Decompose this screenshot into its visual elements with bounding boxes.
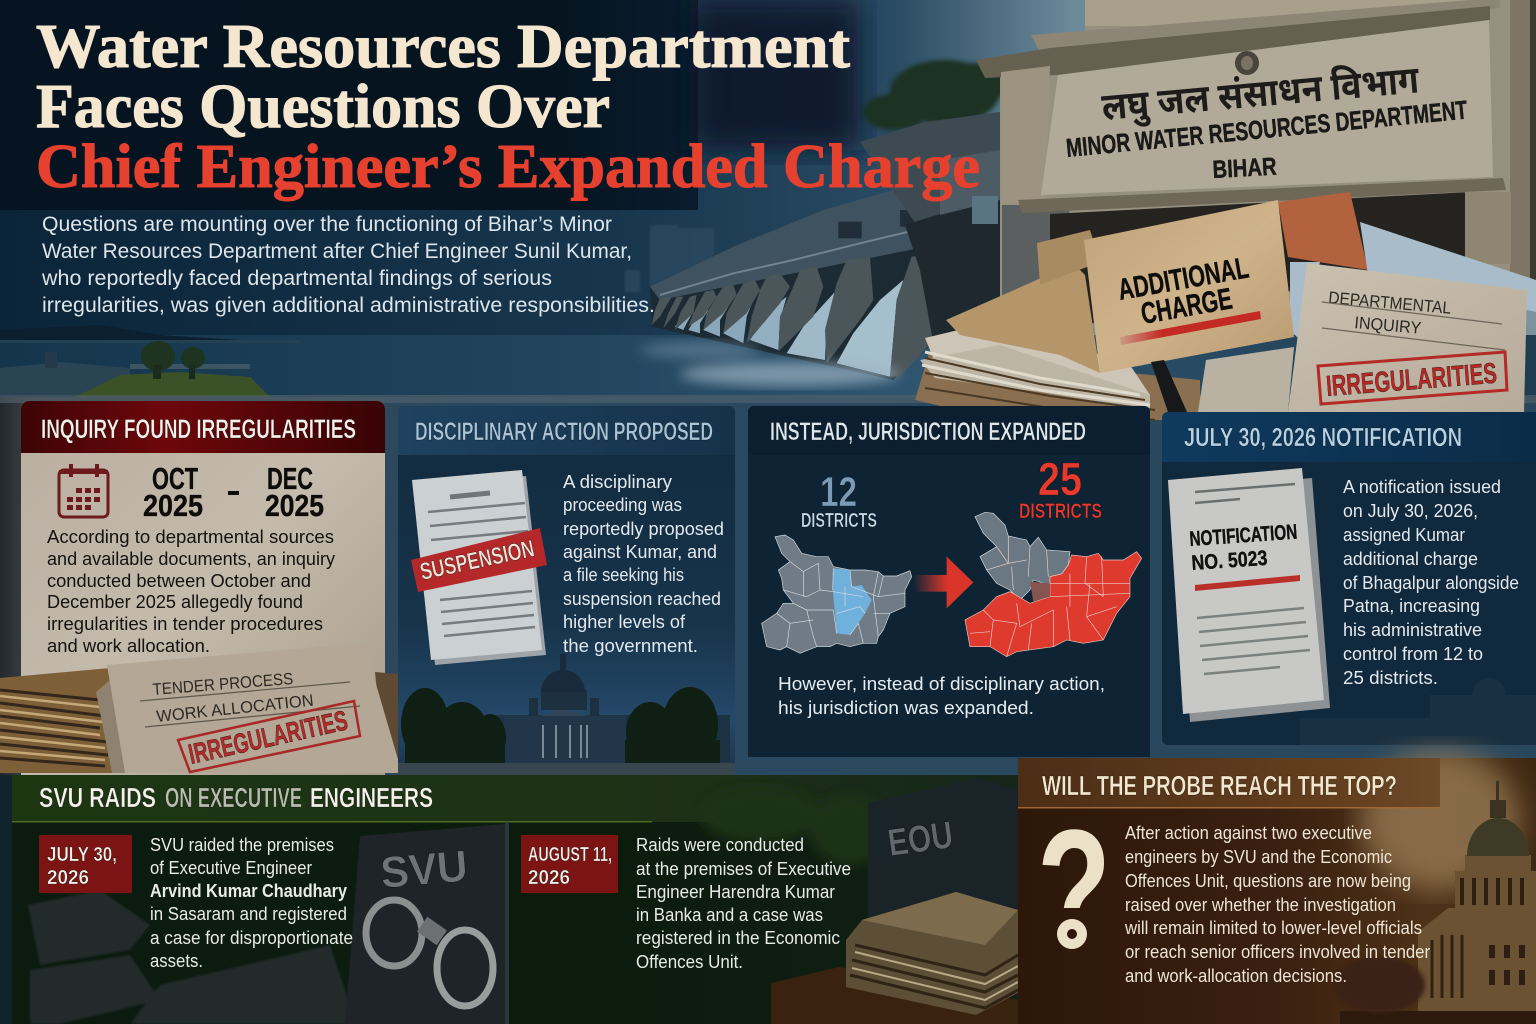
foam at foot of dam [640, 342, 900, 386]
sign plate [1041, 20, 1493, 195]
divider [505, 822, 509, 1024]
panel: will the probe reach the top [1018, 750, 1536, 1024]
blue papers [1360, 222, 1536, 312]
svu text: SVU raided the premises [150, 835, 334, 855]
heading: ON EXECUTIVE [165, 782, 302, 813]
icon: suspension document [411, 470, 547, 665]
body text: his administrative [1343, 620, 1482, 640]
intro text [41, 213, 655, 317]
title: Water Resources Department [36, 13, 850, 81]
body text: proceeding was [563, 495, 682, 515]
25 districts figure [1019, 453, 1102, 523]
12 districts figure: DISTRICTS [801, 510, 877, 532]
date badge: august 11: AUGUST 11, [528, 844, 612, 866]
capitol building with trees [398, 654, 735, 775]
body text: and work allocation. [47, 635, 210, 656]
date range: DEC [267, 461, 313, 496]
background trees [700, 787, 890, 865]
panel: july 30 2026 notification [1162, 412, 1536, 745]
panel: svu raids [0, 775, 1020, 1024]
icon: question mark: ? [1037, 795, 1111, 985]
date badge: july 30: 2026 [47, 867, 89, 889]
folder label: ADDITIONAL [1115, 251, 1251, 307]
body text: and work-allocation decisions. [1125, 966, 1347, 986]
folder stack [0, 668, 408, 773]
heading: SVU RAIDS [39, 782, 156, 813]
main wall [1000, 0, 1536, 300]
building silhouette [1300, 678, 1536, 745]
date range: OCT [152, 461, 198, 496]
body text: Patna, increasing [1343, 596, 1480, 616]
title: Chief Engineer’s Expanded Charge [36, 133, 980, 201]
eou text: in Banka and a case was [636, 905, 823, 925]
body text [47, 526, 336, 656]
departmental inquiry paper [1288, 263, 1527, 412]
body text: a file seeking his [563, 565, 684, 585]
arrow [913, 557, 973, 608]
departmental inquiry paper: INQUIRY [1354, 313, 1422, 338]
heading: WILL THE PROBE REACH THE TOP? [1042, 770, 1397, 801]
date badge: july 30: JULY 30, [47, 844, 117, 866]
ledge [1018, 178, 1506, 213]
body text: higher levels of [563, 612, 686, 632]
document: tender process: TENDER PROCESS [152, 670, 294, 699]
building with dome [1335, 781, 1536, 1024]
heading: ENGINEERS [310, 782, 433, 813]
body text: the government. [563, 636, 698, 656]
eou text: Engineer Harendra Kumar [636, 882, 835, 902]
paper stack [915, 320, 1200, 420]
body text [1343, 477, 1519, 688]
document: tender process: WORK ALLOCATION [156, 692, 315, 726]
eou text: Raids were conducted [636, 835, 804, 855]
back envelope [946, 263, 1100, 373]
orange folder [1278, 192, 1368, 270]
eou box with files: EOU [885, 814, 956, 865]
left wing [860, 112, 1000, 380]
panel: disciplinary action proposed [398, 406, 735, 775]
svu text: in Sasaram and registered [150, 904, 347, 924]
stamp: IRREGULARITIES [186, 705, 350, 770]
documents pile [915, 192, 1536, 420]
far bank with trees [0, 325, 300, 397]
body text: control from 12 to [1343, 644, 1483, 664]
bihar sign text: BIHAR [1212, 153, 1277, 184]
icon: question mark [1042, 829, 1104, 949]
body text: additional charge [1343, 549, 1478, 569]
pen [1151, 360, 1187, 412]
eou text [636, 835, 851, 972]
body text: or reach senior officers involved in tender [1125, 942, 1430, 962]
building with signboard [860, 0, 1536, 380]
suspension stamp: SUSPENSION [418, 535, 537, 586]
svu text: Arvind Kumar Chaudhary [150, 881, 347, 901]
icon: notification document [1168, 468, 1330, 722]
body text: engineers by SVU and the Economic [1125, 847, 1392, 867]
body text: A notification issued [1343, 477, 1501, 497]
icon: notification document: NOTIFICATION [1189, 521, 1298, 551]
folder: additional charge [1084, 200, 1294, 373]
dam [650, 163, 1000, 380]
heading [39, 782, 433, 813]
eou text: at the premises of Executive [636, 859, 851, 879]
body text: of Bhagalpur alongside [1343, 573, 1519, 593]
folder: additional charge: CHARGE [1138, 282, 1235, 331]
trees behind dam [863, 60, 1005, 130]
falls [675, 280, 903, 377]
body text [1124, 823, 1430, 986]
body text: Offences Unit, questions are now being [1125, 871, 1411, 891]
body text: reportedly proposed [563, 519, 724, 539]
caption [778, 673, 1105, 718]
panel: inquiry found irregularities [0, 401, 408, 775]
body text [563, 472, 724, 656]
body text: After action against two executive [1125, 823, 1372, 843]
date range [143, 461, 324, 523]
document: tender process [96, 643, 402, 773]
piers [652, 253, 947, 377]
body text: conducted between October and [47, 570, 311, 591]
body text: against Kumar, and [563, 542, 717, 562]
eou text: registered in the Economic [636, 928, 840, 948]
eou box with files [771, 778, 1020, 1024]
date badge: august 11 [521, 835, 618, 893]
caption: his jurisdiction was expanded. [778, 697, 1034, 718]
svu text [150, 835, 353, 971]
body text: December 2025 allegedly found [47, 591, 303, 612]
icon: notification document: NO. 5023 [1191, 547, 1268, 575]
date range: 2025 [143, 488, 203, 523]
title: Faces Questions Over [36, 73, 610, 141]
intro text: irregularities, was given additional administrative responsibilities. [42, 294, 655, 317]
body text: A disciplinary [563, 472, 672, 492]
body text: raised over whether the investigation [1125, 895, 1396, 915]
intro text: Questions are mounting over the functioning of Bihar’s Minor [42, 213, 612, 236]
svu box with handcuffs: SVU [379, 842, 470, 898]
heading: INQUIRY FOUND IRREGULARITIES [41, 414, 356, 444]
heading: DISCIPLINARY ACTION PROPOSED [415, 418, 713, 446]
doorway shadow [1050, 192, 1470, 330]
svu text: of Executive Engineer [150, 858, 312, 878]
date range: 2025 [265, 488, 324, 523]
small paper [1198, 347, 1294, 412]
distant factory [625, 225, 714, 292]
body text: suspension reached [563, 589, 721, 609]
svu text: a case for disproportionate [150, 928, 353, 948]
body text: and available documents, an inquiry [47, 548, 336, 569]
body text: According to departmental sources [47, 526, 334, 547]
body text: assigned Kumar [1343, 525, 1465, 545]
date badge: july 30 [39, 835, 132, 893]
header background scene [0, 0, 1536, 785]
body text: on July 30, 2026, [1343, 501, 1478, 521]
intro text: who reportedly faced departmental findings of serious [41, 267, 552, 290]
heading: JULY 30, 2026 NOTIFICATION [1184, 422, 1462, 452]
25 districts figure: 25 [1038, 453, 1082, 505]
map: 12 districts [762, 535, 912, 653]
body text: 25 districts. [1343, 668, 1438, 688]
date badge: august 11: 2026 [528, 867, 570, 889]
hindi sign text: लघु जल संसाधन विभाग [1100, 57, 1423, 136]
title [36, 13, 980, 201]
25 districts figure: DISTRICTS [1019, 500, 1102, 523]
heading: INSTEAD, JURISDICTION EXPANDED [770, 418, 1086, 446]
eou text: Offences Unit. [636, 952, 743, 972]
intro text: Water Resources Department after Chief Engineer Sunil Kumar, [42, 240, 632, 263]
rocky ground [28, 890, 356, 1024]
map: 25 districts [965, 512, 1142, 657]
icon: calendar [59, 464, 108, 517]
caption: However, instead of disciplinary action, [778, 673, 1105, 694]
title backdrop [0, 0, 698, 210]
pillar [1001, 66, 1050, 205]
12 districts figure [801, 468, 877, 532]
emblem [1235, 51, 1259, 75]
svu box with handcuffs [345, 824, 505, 1024]
svu text: assets. [150, 951, 203, 971]
panel: instead, jurisdiction expanded [748, 406, 1150, 757]
right column [1510, 0, 1536, 300]
body text: will remain limited to lower-level officials [1124, 918, 1422, 938]
departmental inquiry paper: DEPARTMENTAL [1328, 288, 1452, 318]
12 districts figure: 12 [820, 468, 857, 515]
body text: irregularities in tender procedures [47, 613, 323, 634]
lower background [0, 397, 1536, 785]
stamp [178, 701, 360, 772]
